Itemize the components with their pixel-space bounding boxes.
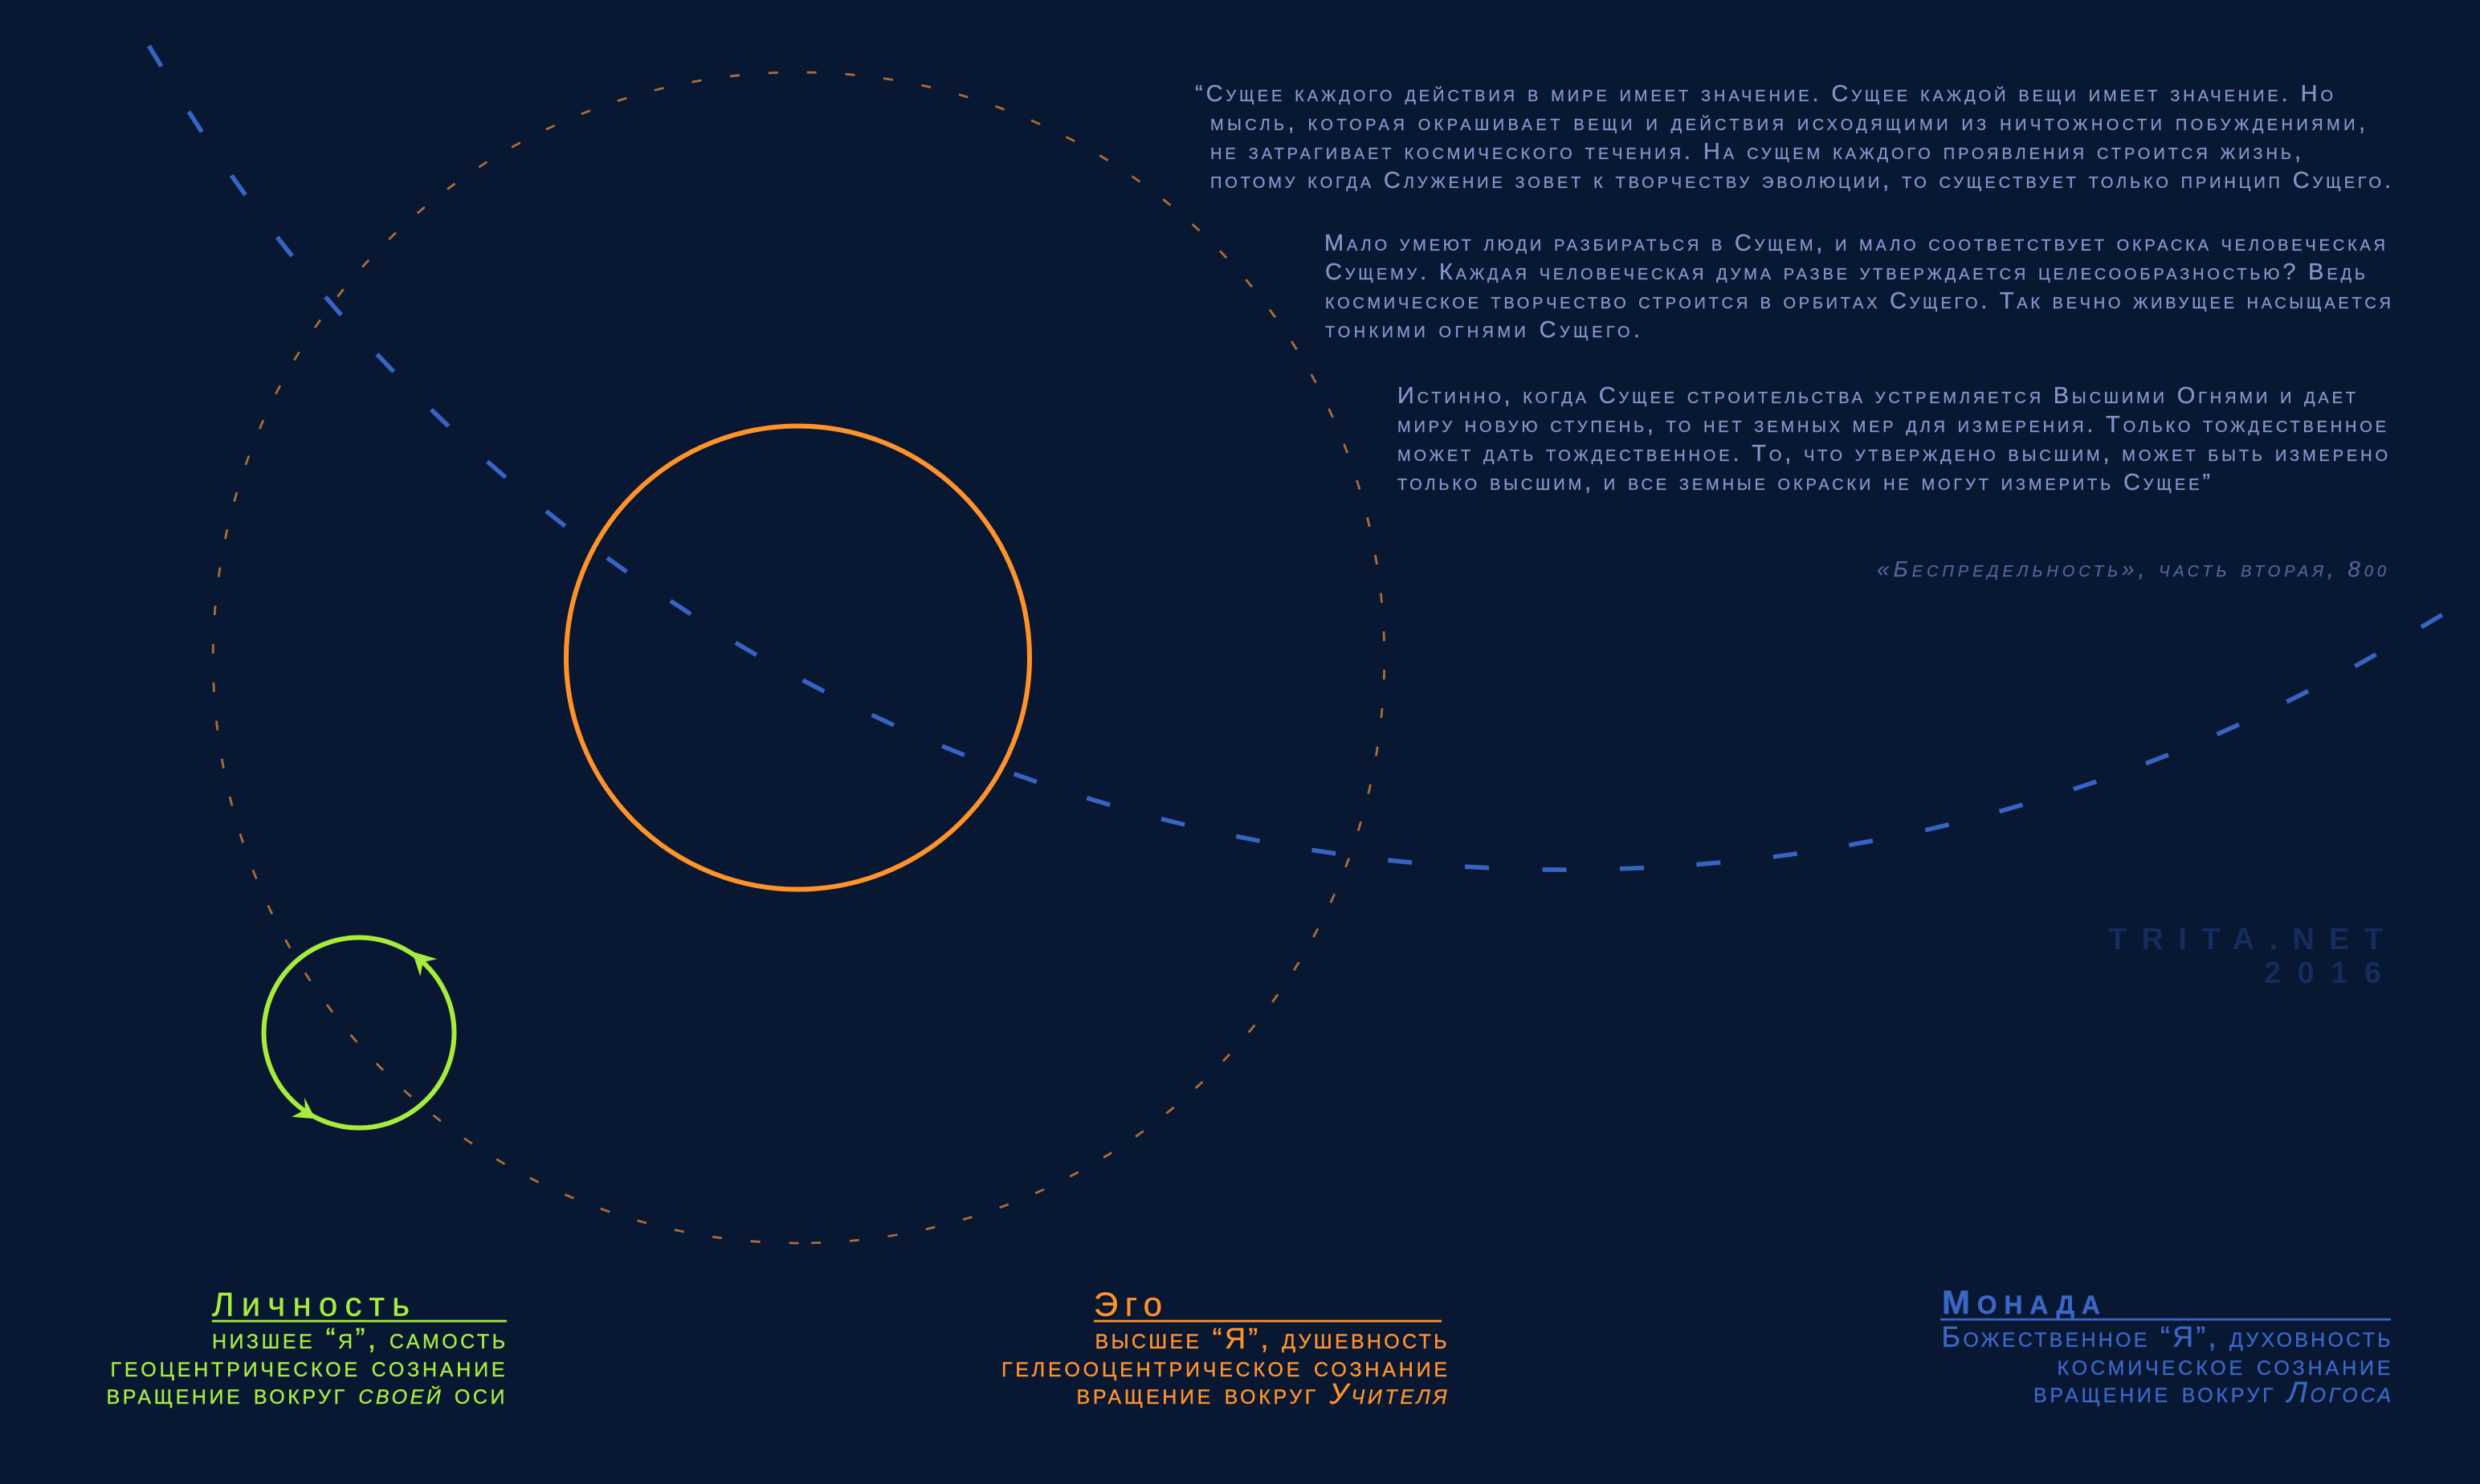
quote: first paragraph: потому когда Служение зовет к творчеству эволюции, то существует только принцип Сущего. [1210, 168, 2391, 194]
quote: first paragraph [1195, 81, 2391, 194]
quote: third paragraph: миру новую ступень, то нет земных мер для измерения. Только тождественное [1397, 412, 2386, 438]
quote: second paragraph: Сущему. Каждая человеческая дума разве утверждается целесообразностью? Ведь [1325, 259, 2365, 285]
legend: ego [1001, 1285, 1447, 1410]
heading: monad: Монада [1942, 1280, 2100, 1322]
monad orbit: blue dashed curve [155, 56, 2432, 870]
ego: large orange circle [566, 426, 1030, 890]
text block: ego description [1001, 1322, 1447, 1410]
legend: personality [106, 1285, 507, 1410]
text block: monad description: Божественное “Я”, духовность [1942, 1320, 2390, 1353]
quote: second paragraph: Мало умеют люди разбираться в Сущем, и мало соответствует окраска человеческая [1324, 230, 2385, 256]
quote: second paragraph: тонкими огнями Сущего. [1325, 317, 1640, 343]
watermark: TRITA.NET [2108, 923, 2383, 956]
text block: personality description: геоцентрическое сознание [111, 1350, 504, 1383]
text block: personality description [106, 1322, 505, 1410]
quote: third paragraph: может дать тождественное. То, что утверждено высшим, может быть измерено [1397, 441, 2388, 467]
watermark: 2016 [2264, 956, 2381, 990]
text block: monad description: вращение вокруг Логоса [2033, 1376, 2391, 1409]
icon: bottom arrowhead [292, 1098, 316, 1119]
legend: monad [1940, 1280, 2391, 1409]
quote: first paragraph: “Сущее каждого действия в мире имеет значение. Сущее каждой вещи имеет значение. Но [1195, 81, 2333, 107]
quote: first paragraph: мысль, которая окрашивает вещи и действия исходящими из ничтожности побуждениями, [1210, 110, 2365, 136]
text block: monad description: космическое сознание [2058, 1348, 2390, 1381]
quote: third paragraph [1397, 383, 2388, 495]
quote: first paragraph: не затрагивает космического течения. На сущем каждого проявления строится жизнь, [1210, 139, 2301, 165]
heading: ego: Эго [1094, 1285, 1162, 1323]
text block: monad description [1942, 1320, 2391, 1409]
heading: personality: Личность [212, 1285, 410, 1323]
quote: third paragraph: Истинно, когда Сущее строительства устремляется Высшими Огнями и дает [1397, 383, 2356, 409]
personality: green circle with arrows [263, 938, 455, 1127]
icon: top arrowhead [412, 952, 437, 976]
text block: personality description: вращение вокруг своей оси [106, 1377, 504, 1410]
text block: ego description: вращение вокруг Учителя [1076, 1377, 1447, 1410]
ego orbit: dashed large circle [213, 72, 1385, 1243]
quote: second paragraph [1324, 230, 2391, 343]
watermark [2108, 923, 2383, 990]
quote: third paragraph: только высшим, и все земные окраски не могут измерить Сущее” [1397, 470, 2210, 495]
attribution: «Беспредельность», часть вторая, 800 [1877, 556, 2386, 581]
text block: personality description: низшее “я”, самость [212, 1322, 505, 1355]
quote: second paragraph: космическое творчество строится в орбитах Сущего. Так вечно живущее насыщается [1325, 288, 2391, 314]
text block: ego description: высшее “Я”, душевность [1095, 1322, 1447, 1355]
text block: ego description: гелеооцентрическое сознание [1001, 1350, 1447, 1383]
